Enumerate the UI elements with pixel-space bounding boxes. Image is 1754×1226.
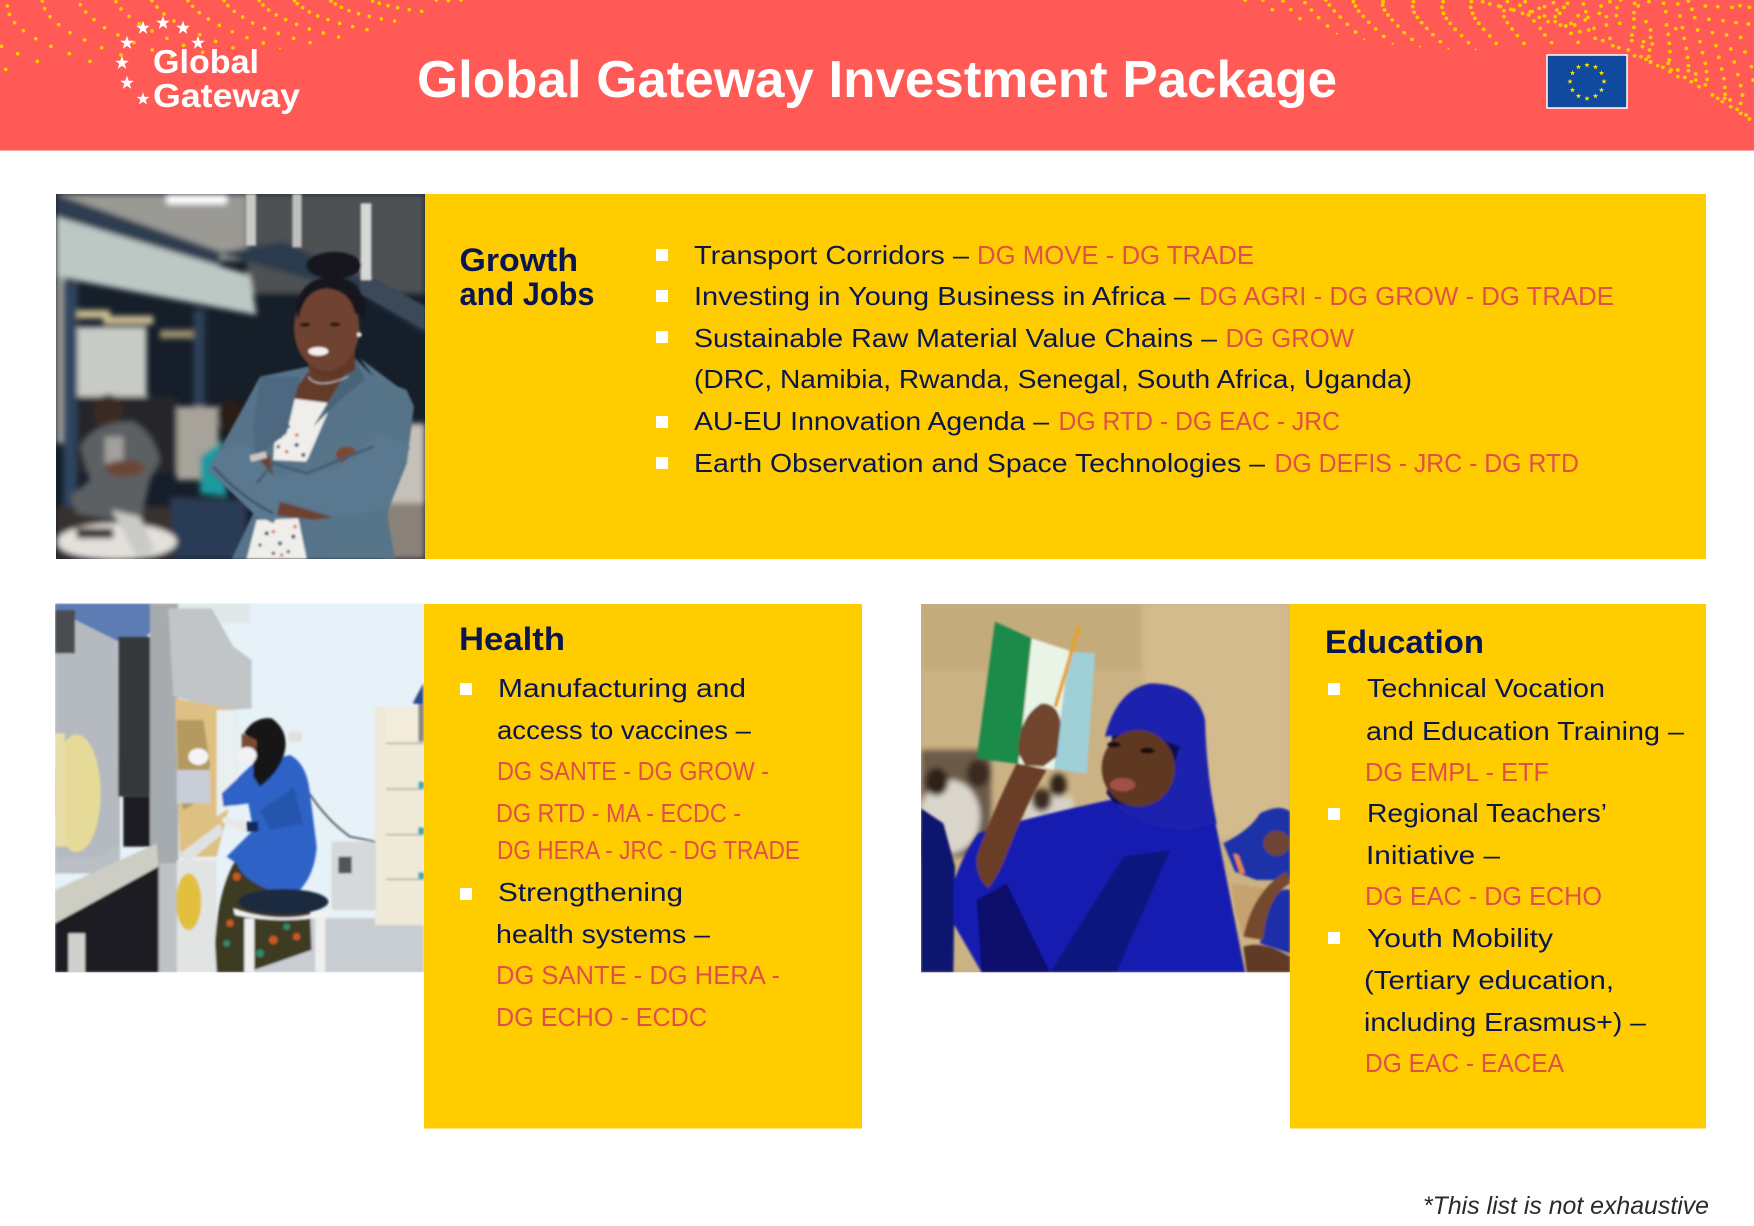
bullet list: Manufacturing and [498,675,746,703]
bullet list: Youth Mobility [1367,925,1553,953]
bullet list [460,675,800,1032]
panel: health [53,603,862,1128]
logo wordmark [153,43,301,114]
bullet list: DG EAC - EACEA [1365,1050,1565,1078]
panel: growth and jobs [56,194,1706,560]
education text panel [1290,604,1706,1128]
bullet list: DG MOVE - DG TRADE [977,242,1254,270]
bullet list: and Education Training – [1366,718,1685,746]
bullet list [656,242,1614,478]
logo wordmark: Gateway [153,77,301,114]
header band [0,0,1754,151]
heading: Education [1325,624,1484,660]
footnote: *This list is not exhaustive [1423,1192,1709,1220]
bullet list: DG EAC - DG ECHO [1365,883,1602,911]
bullet list: DG EMPL - ETF [1365,759,1549,787]
bullet list: DG GROW [1226,325,1355,353]
bullet list: DG RTD - MA - ECDC - [496,800,741,828]
bullet list: DG SANTE - DG GROW - [497,758,769,786]
bullet list: Initiative – [1366,842,1501,870]
bullet list: Earth Observation and Space Technologies – [694,450,1266,478]
decorative dots: right [1243,0,1754,121]
growth and jobs text panel [425,194,1706,559]
title: Global Gateway Investment Package [417,51,1337,109]
bullet list: DG DEFIS - JRC - DG RTD [1274,450,1579,478]
bullet list: Investing in Young Business in Africa – [694,283,1191,311]
bullet list: (Tertiary education, [1364,967,1614,995]
decorative dots: left [0,0,463,71]
panel: education [920,604,1706,1128]
icon: EU flag [1547,55,1627,108]
logo wordmark: Global [153,43,259,80]
bullet list: DG HERA - JRC - DG TRADE [497,837,800,865]
bullet list: DG RTD - DG EAC - JRC [1058,408,1340,436]
bullet list: DG SANTE - DG HERA - [496,962,780,990]
bullet list: Strengthening [498,879,683,907]
bullet list: Transport Corridors – [694,242,970,270]
photo: businesswoman with arms crossed in an office [56,194,425,560]
bullet list: health systems – [496,921,711,949]
bullet list: AU-EU Innovation Agenda – [694,408,1050,436]
heading: and Jobs [460,276,594,312]
bullet list: Sustainable Raw Material Value Chains – [694,325,1218,353]
bullet list: (DRC, Namibia, Rwanda, Senegal, South Africa, Uganda) [694,366,1412,394]
heading: Growth [460,242,578,278]
photo: lab technician at a safety cabinet [53,603,424,972]
bullet list: DG ECHO - ECDC [496,1004,707,1032]
photo: student in a blue hijab raising a pencil [920,604,1290,972]
icon: ring of stars [115,16,205,105]
bullet list [1328,675,1685,1078]
bullet list: Technical Vocation [1367,675,1605,703]
health text panel [424,604,862,1128]
logo: Global Gateway [115,16,301,114]
bullet list: including Erasmus+) – [1364,1009,1647,1037]
bullet list: Regional Teachers’ [1367,800,1607,828]
bullet list: access to vaccines – [497,717,752,745]
heading [460,242,594,312]
heading: Health [459,621,565,657]
bullet list: DG AGRI - DG GROW - DG TRADE [1199,283,1614,311]
